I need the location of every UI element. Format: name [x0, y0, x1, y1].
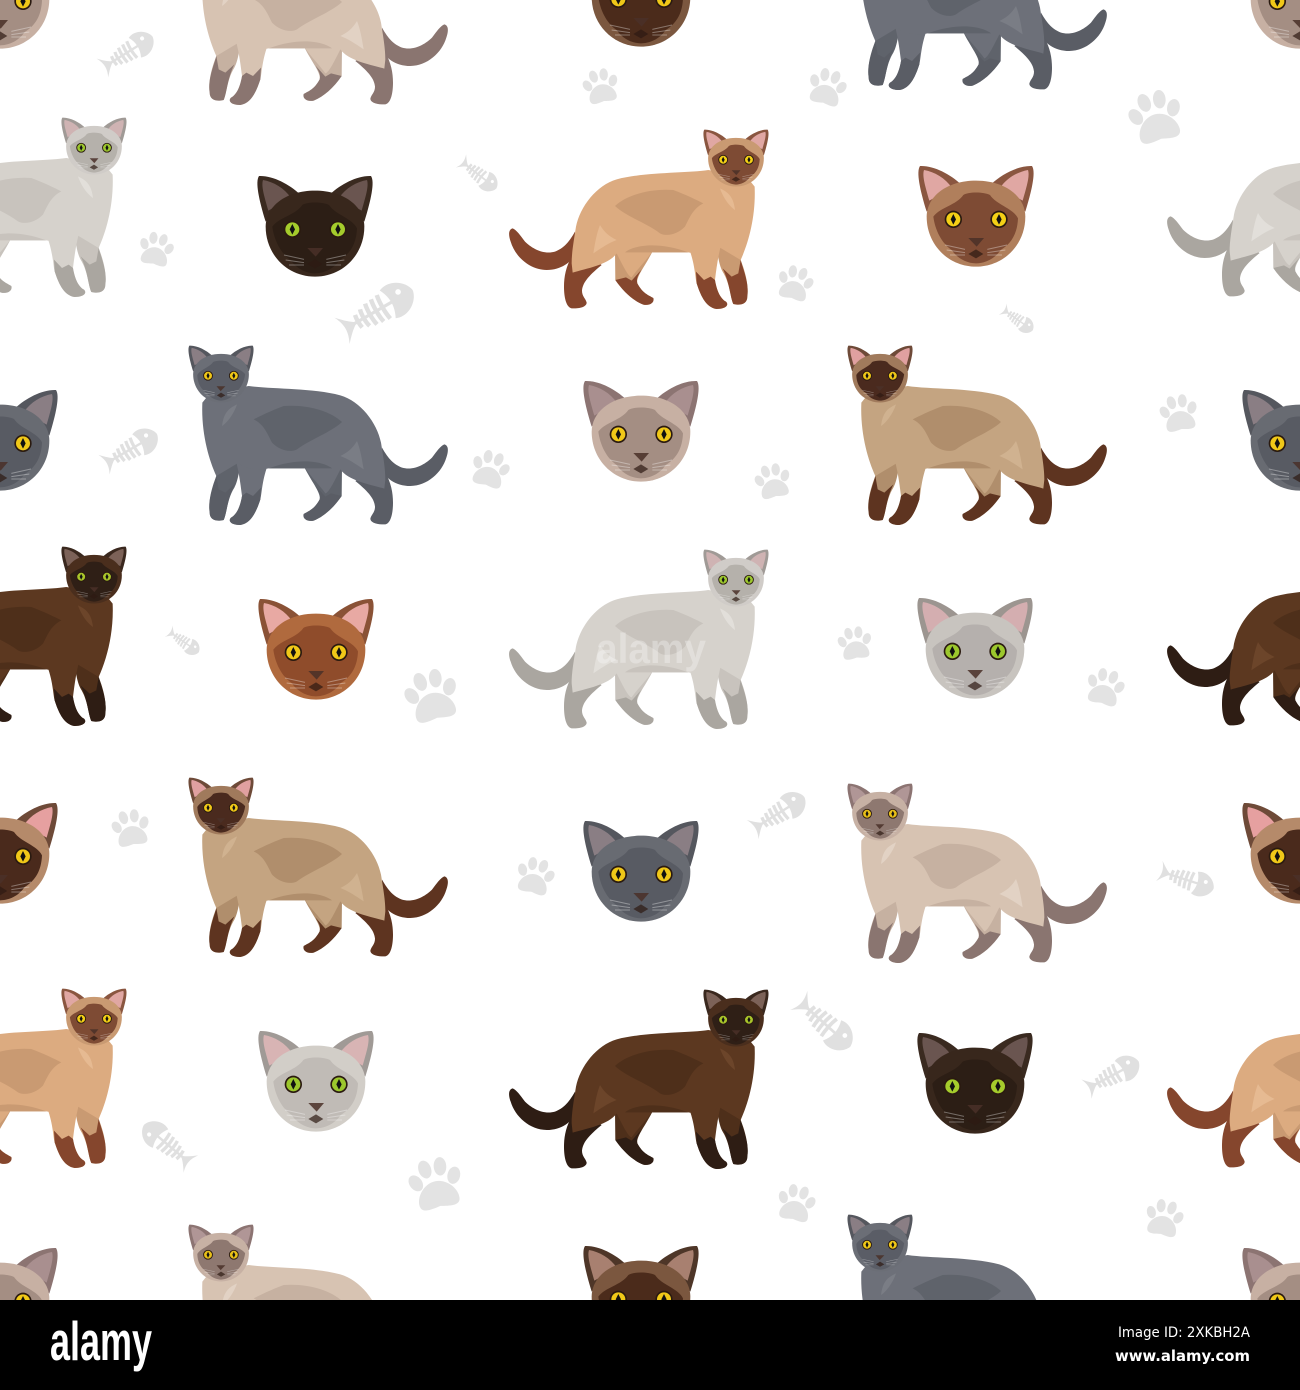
cat: sable right edge	[1167, 547, 1300, 726]
cat: tan left edge	[0, 989, 127, 1168]
head: point	[583, 381, 699, 482]
head: sable	[917, 1033, 1033, 1134]
cat: sable left edge	[0, 547, 127, 726]
paw prints	[107, 64, 1202, 1239]
head: gray right	[1242, 390, 1300, 491]
website: www.alamy.com	[1115, 1347, 1250, 1365]
head: chocolate bottom	[583, 1246, 699, 1347]
head: silver	[917, 598, 1033, 699]
head: brown	[918, 166, 1034, 267]
cat: gray standing	[188, 346, 448, 525]
cat: silver left edge	[0, 118, 127, 297]
cat: gray top	[847, 0, 1107, 90]
footer logo: alamy	[50, 1310, 152, 1372]
fish bones	[96, 26, 1217, 1174]
head: gray	[583, 821, 699, 922]
head: seal left	[0, 803, 58, 904]
cat: coffee standing	[847, 346, 1107, 525]
head: dark sable	[257, 176, 373, 277]
head: taupe top right	[1242, 0, 1300, 49]
cat: tan right edge	[1167, 989, 1300, 1168]
cat: tan standing	[509, 130, 769, 309]
cat: taupe standing lower	[847, 784, 1107, 963]
cat: sable standing	[509, 990, 769, 1169]
watermark: alamy	[596, 625, 707, 672]
head: chocolate top	[583, 0, 699, 47]
image id: Image ID: 2XKBH2A	[1118, 1325, 1250, 1341]
head: light silver	[258, 1031, 374, 1132]
cat: silver standing	[509, 550, 769, 729]
cat: silver right edge	[1167, 118, 1300, 297]
footer bar	[0, 1300, 1300, 1390]
head: taupe bottom left	[0, 1248, 58, 1349]
cat: taupe bottom	[188, 1225, 448, 1390]
cat: gray bottom	[847, 1215, 1107, 1390]
head: seal right	[1242, 803, 1300, 904]
cat: coffee standing lower	[188, 778, 448, 957]
head: gray left	[0, 390, 58, 491]
head: taupe bottom right	[1242, 1248, 1300, 1349]
cat: taupe top	[188, 0, 448, 105]
head: taupe top left	[0, 0, 58, 49]
head: red brown	[258, 599, 374, 700]
